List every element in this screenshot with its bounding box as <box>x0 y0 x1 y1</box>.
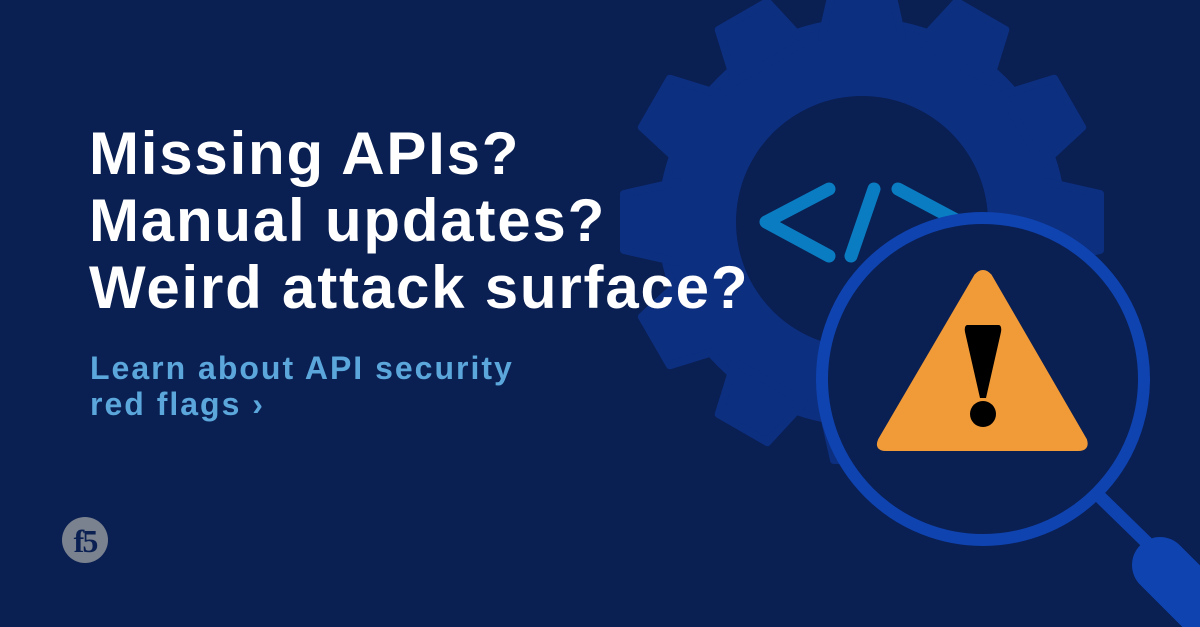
title <box>89 120 749 321</box>
title: Missing APIs? <box>89 120 520 187</box>
call to action link <box>90 350 514 422</box>
icon: magnifying glass <box>822 218 1200 627</box>
icon: warning triangle <box>879 272 1086 449</box>
call to action link: Learn about API security <box>90 350 514 386</box>
title: Weird attack surface? <box>89 254 749 321</box>
icon: gear <box>624 0 1100 460</box>
logo: f5: f5 <box>74 523 97 559</box>
icon: code brackets <box>766 189 960 256</box>
title: Manual updates? <box>89 187 606 254</box>
call to action link: red flags › <box>90 386 265 422</box>
logo: f5 <box>62 517 108 563</box>
